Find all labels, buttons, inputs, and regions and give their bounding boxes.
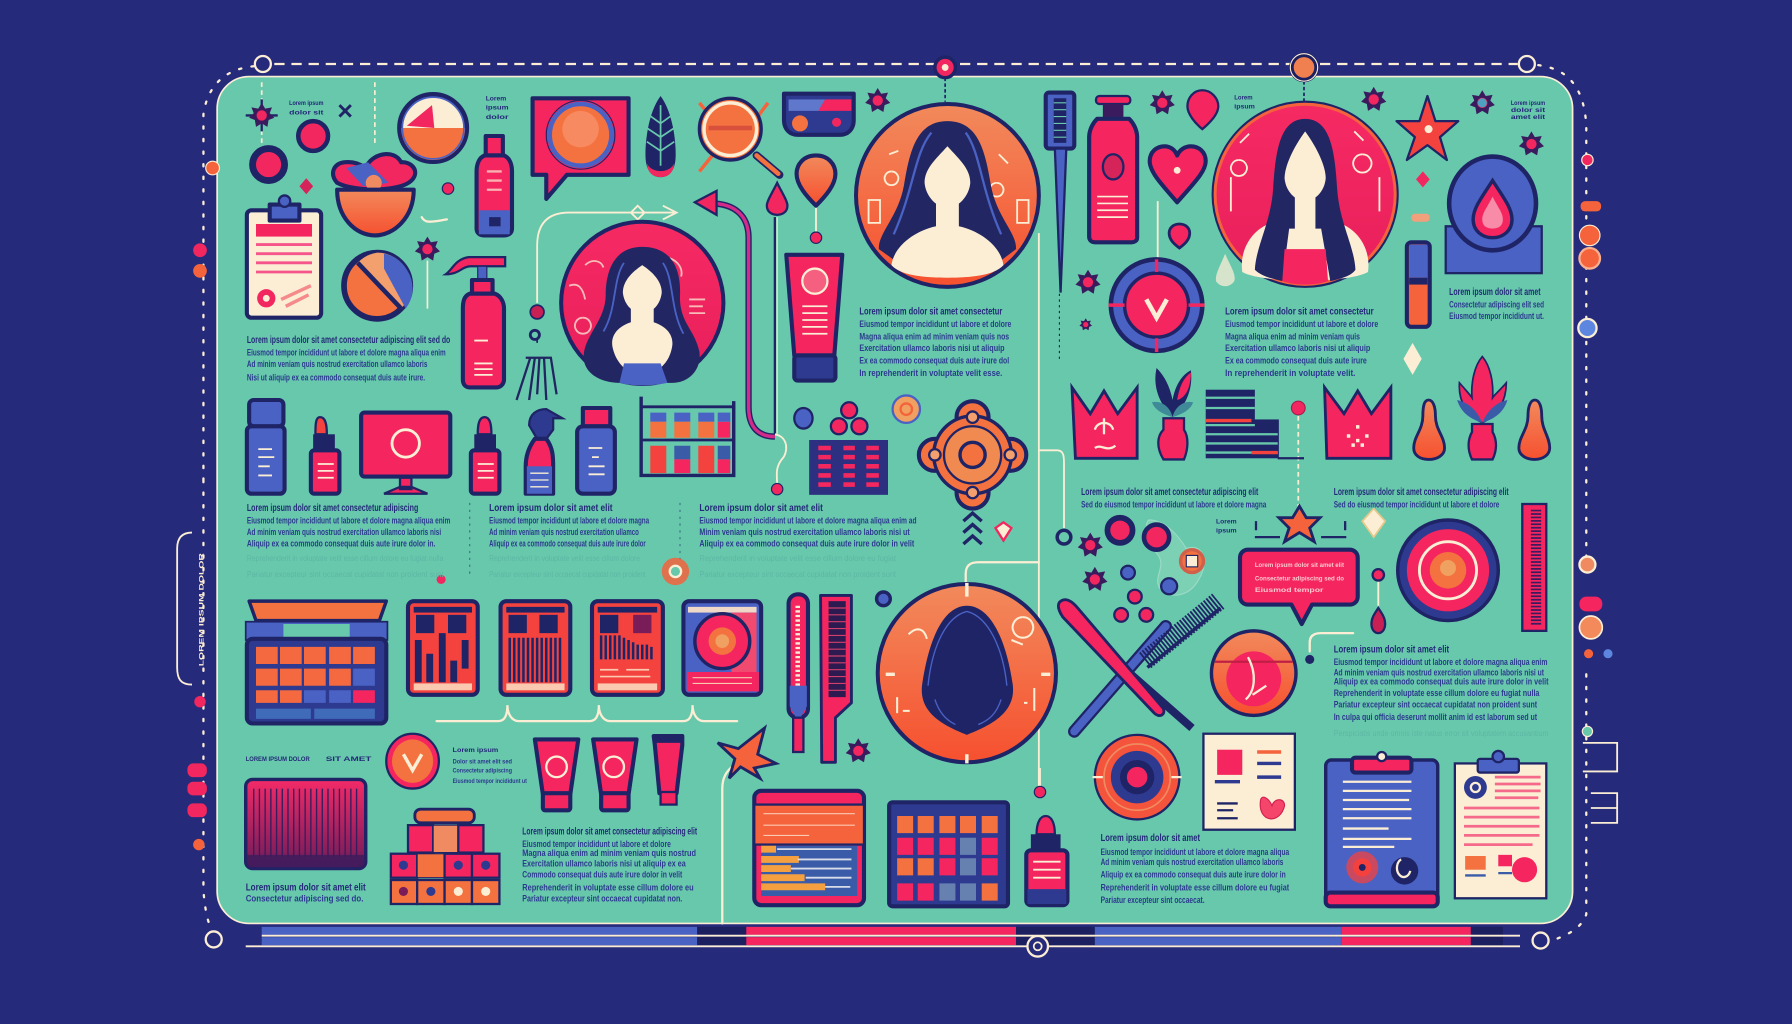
icon: tiny accent [1079,318,1092,330]
icon: small shield [1169,224,1190,248]
text block: bottom left middle: Eiusmod tempor incididunt ut labore et dolore [522,839,671,849]
text block: top right [1449,287,1544,321]
text block: centre column: Exercitation ullamco laboris nisi ut aliquip [1225,343,1371,353]
icon: blue bottle [247,400,285,494]
text block: right middle: Eiusmod tempor incididunt ut labore et dolore magna aliqua enim [1334,657,1547,667]
text block: crown captions left: Lorem ipsum dolor sit amet consectetur adipiscing elit [1081,487,1259,498]
chart: stepped stripes [1206,390,1304,458]
text block: crown captions left [1081,487,1267,509]
chart card: bars three [592,601,663,695]
text block: bottom right [1101,833,1290,905]
portrait: orange hair silhouette [878,583,1056,763]
icon: flower ornament [1361,87,1386,111]
left side strip: LOREM IPSUM DOLOR [198,552,205,666]
text block: row three column three: Lorem ipsum dolor sit amet elit [699,503,824,514]
text block: row three column one [247,503,450,579]
text block: bottom left middle: Reprehenderit in voluptate esse cillum dolore eu [522,882,694,892]
icon: tools [339,105,351,117]
text block: centre column [1225,306,1378,378]
icon: target button [1109,259,1205,352]
icon: heart [1150,146,1206,202]
icon: palette rack [641,397,734,475]
icon: pie chart [400,95,466,161]
icon: clipboard [247,195,321,318]
icon: lipstick [1407,242,1430,327]
label: top right caption: amet elit [1511,114,1546,121]
text block: row three column three: Aliquip ex ea commodo consequat duis aute irure dolor in velit [699,538,914,548]
icon: blue clipboard [1326,752,1438,906]
callout bubble [1240,550,1358,624]
text block: row three column three: Reprehenderit in voluptate velit esse cillum dolore eu fugiat [699,554,897,563]
text block: top right: Lorem ipsum dolor sit amet [1449,287,1541,298]
text block: row three column three: Pariatur excepteur sint occaecat cupidatat non proident sunt [699,570,897,579]
icon: blue drop medallion [1446,157,1542,273]
icon: dark striped card [809,440,888,495]
icon: pin over chart [1291,401,1305,415]
label: cluster caption: Lorem [1216,518,1237,525]
text block: top right: Consectetur adipiscing elit sed [1449,299,1544,309]
text block: bottom right: Eiusmod tempor incididunt ut labore et dolore magna aliqua [1101,847,1290,857]
text block: top left: Nisi ut aliquip ex ea commodo consequat duis aute irure. [247,373,425,383]
icon: plant pot two [1457,357,1507,459]
icon: plant pot one [1152,368,1193,459]
text block: centre column: In reprehenderit in voluptate velit. [1225,368,1355,378]
label: top left caption: Lorem ipsum [289,100,324,107]
top dashed connector [203,54,1586,571]
card: circular button [683,601,761,695]
text block: row three column two: Aliquip ex ea commodo consequat duis aute irure dolor [489,538,646,548]
text block: centre column: Lorem ipsum dolor sit amet consectetur [1225,306,1374,317]
text block: row three column one: Lorem ipsum dolor sit amet consectetur adipiscing [247,503,418,514]
label: dashed caption [246,756,372,763]
text block: bottom right: Lorem ipsum dolor sit amet [1101,833,1201,844]
icon: drop vase two [1519,400,1550,459]
label: pie caption: ipsum [486,105,509,112]
text block: tube column: Lorem ipsum dolor sit amet consectetur [859,306,1002,317]
label: top left caption: dolor sit [289,109,325,116]
text block: right middle: Reprehenderit in voluptate esse cillum dolore eu fugiat nulla [1334,688,1540,698]
icon: small target [893,395,920,423]
icon: brush [517,358,557,400]
icon: ring node [877,592,890,606]
icon: bowl with flower [333,154,415,235]
text block: row three column three: Minim veniam quis nostrud exercitation ullamco laboris nisi ut [699,527,910,537]
label: dashed caption: SIT AMET [326,756,372,763]
icon: star flower [846,738,871,762]
text block: tube column: Eiusmod tempor incididunt ut labore et dolore [859,319,1011,329]
icon: flower ornament right [1470,90,1495,114]
icon: balloon pin [797,155,835,206]
icon: comb upright [821,595,851,762]
icon: flower near comb [1075,270,1101,294]
icon: network dots cluster [1078,518,1204,622]
icon: orange pink circle [1211,631,1296,715]
text block: row three column two: Eiusmod tempor incididunt ut labore et dolore magna [489,515,650,525]
text block: crown captions right [1334,487,1509,509]
callout bubble: Consectetur adipiscing sed do [1255,576,1344,583]
icon: thermometer brush [789,594,808,752]
text block: swatch caption [246,882,366,904]
text block: bottom left middle: Commodo consequat duis aute irure dolor in velit [522,870,682,880]
icon: big card [754,791,864,905]
icon: spray bottle [446,257,505,387]
icon: cream clipboard [1455,751,1546,898]
icon: no sign [344,253,413,319]
text block: row three column three: Eiusmod tempor incididunt ut labore et dolore magna aliqua enim ad [699,515,917,525]
label: pin caption: Lorem [1234,94,1253,101]
text block: v button caption: Consectetur adipiscing [453,768,512,775]
text block: bottom left middle [522,826,698,904]
icon: speech bubble [533,98,629,199]
text block: tube column: Ex ea commodo consequat duis aute irure dol [859,355,1009,365]
text block: row three column two: Lorem ipsum dolor sit amet elit [489,503,613,514]
icon: pin with drop [1371,569,1385,633]
icon: starburst small [415,237,440,261]
icon: tall pink bottle [1089,96,1137,242]
icon: comb tall [1046,93,1074,293]
icon: pink bottle [477,136,512,235]
text block: row three column one: Aliquip ex ea commodo consequat duis aute irure dolor in. [247,538,435,548]
text block: row three column two: Ad minim veniam quis nostrud exercitation ullamco [489,527,639,537]
text block: row three column three [699,503,917,579]
text block: row three column one: Pariatur excepteur sint occaecat cupidatat non proident sunt [247,570,444,579]
portrait: pink woman wavy hair [561,222,723,385]
text block: right middle: Perspiciatis unde omnis iste natus error sit voluptatem accusantium [1334,729,1549,738]
text block: crown captions right: Sed do eiusmod tempor incididunt ut labore et dolore [1334,499,1499,509]
label: top left caption [289,100,325,116]
right side strip [1578,154,1617,823]
label: pin caption: ipsum [1234,104,1255,111]
icon: pink location pin [1187,90,1218,129]
text block: row three column one: Reprehenderit in voluptate velit esse cillum dolore eu fugiat nulla [247,554,444,563]
text block: crown captions right: Lorem ipsum dolor sit amet consectetur adipiscing elit [1334,487,1509,498]
icon: comb strip [1522,504,1546,631]
text block: top left [247,335,450,383]
text block: v button caption [453,747,527,785]
icon: cream accent [1216,254,1235,286]
text block: centre column: Ex ea commodo consequat duis aute irure [1225,355,1367,365]
icon: chevrons [963,513,982,544]
icon: accents [1403,171,1430,375]
text block: row three column two: Reprehenderit in voluptate velit esse cillum dolore [489,554,640,563]
icon: hair swatch [246,779,366,869]
icon: big target [1398,520,1498,621]
icon: crown one [1072,387,1137,458]
icon: drop [767,183,787,215]
icon: monitor [361,413,450,494]
icon: crossed comb and brush [1058,600,1221,731]
text block: tube column [859,306,1011,378]
text block: top right: Eiusmod tempor incididunt ut. [1449,311,1544,321]
icon: pink dot two [253,149,285,181]
label: top right caption [1511,100,1546,121]
icon: magnifier [699,98,779,175]
text block: right middle: In culpa qui officia deserunt mollit anim id est laborum sed ut [1334,712,1537,722]
text block: centre column: Eiusmod tempor incididunt ut labore et dolore [1225,319,1378,329]
icon: starburst top left [246,99,278,131]
text block: bottom left middle: Lorem ipsum dolor sit amet consectetur adipiscing elit [522,826,698,837]
chart card: bars one [408,601,478,695]
icon: pink dot [298,121,328,151]
text block: row three column one: Ad minim veniam quis nostrud exercitation ullamco laboris nisi [247,527,441,537]
icon: small spray [526,409,562,494]
text block: right middle: Lorem ipsum dolor sit amet elit [1334,645,1450,656]
text block: bottom right: Ad minim veniam quis nostrud exercitation ullamco laboris [1101,857,1283,867]
icon: concentric disc [1093,735,1182,819]
icon: orange ornament [919,401,1026,509]
label: top right caption: dolor sit [1511,107,1546,114]
text block: bottom right: Reprehenderit in voluptate esse cillum dolore eu fugiat [1101,882,1289,892]
left side strip [177,161,219,850]
label: pie caption: dolor [486,114,509,121]
text block: bottom left middle: Magna aliqua enim ad minim veniam quis nostrud [522,848,696,858]
text block: row three column one: Eiusmod tempor incididunt ut labore et dolore magna aliqua enim [247,515,450,525]
icon: curved connector with arrow [530,206,677,343]
bottom colour band [203,480,1586,957]
callout bubble: Lorem ipsum dolor sit amet elit [1255,562,1345,569]
icon: flower ornament lower [1519,131,1544,155]
text block: swatch caption: Consectetur adipiscing sed do. [246,894,363,904]
label: pin caption [1234,94,1255,111]
icon: diamonds and dots [299,178,454,222]
panel: main board [217,77,1573,923]
text block: crown captions left: Sed do eiusmod tempor incididunt ut labore et dolore magna [1081,499,1267,509]
icon: flower tiny [1150,90,1175,114]
text block: right middle: Ad minim veniam quis nostrud exercitation ullamco laboris nisi ut [1334,667,1544,677]
label: dashed caption: LOREM IPSUM DOLOR [246,756,310,763]
icon: drop vase one [1414,400,1445,459]
arrow: magenta curved [695,191,775,437]
text block: v button caption: Eiusmod tempor incididunt ut [453,778,527,785]
text block: bottom left middle: Exercitation ullamco laboris nisi ut aliquip ex ea [522,858,686,868]
text block: top left: Lorem ipsum dolor sit amet consectetur adipiscing elit sed do [247,335,450,346]
icon: v button [386,734,439,789]
portrait: orange woman straight hair [856,104,1039,287]
text block: swatch caption: Lorem ipsum dolor sit amet elit [246,882,366,893]
text block: v button caption: Lorem ipsum [453,747,498,754]
label: top right caption: Lorem ipsum [1511,100,1546,107]
text block: right middle: Pariatur excepteur sint occaecat cupidatat non proident sunt [1334,699,1537,709]
text block: right middle: Aliquip ex ea commodo consequat duis aute irure dolor in velit [1334,677,1549,687]
icon: tube [786,255,842,381]
icon: tube two [593,739,637,810]
text block: row three column two [489,503,650,579]
icon: tube one [535,739,578,810]
label: pie caption [486,96,509,121]
text block: bottom right: Pariatur excepteur sint occaecat. [1101,895,1205,905]
icon: document card [1203,734,1295,830]
text block: tube column: Magna aliqua enim ad minim veniam quis nos [859,331,1009,341]
icon: calendar palette [246,601,387,723]
icon: dots cluster [794,402,867,434]
icon: star with bracket [1255,506,1346,542]
icon: flower small [865,88,890,112]
icon: block pyramid [391,809,499,904]
label: cluster caption [1216,518,1237,535]
text block: right middle [1334,645,1549,738]
label: pie caption: Lorem [486,96,507,103]
text block: top left: Eiusmod tempor incididunt ut labore et dolore magna aliqua enim [247,347,446,357]
text block: tube column: In reprehenderit in voluptate velit esse. [859,368,1002,378]
icon: small gem [995,522,1011,541]
icon: star orange [718,728,776,778]
text block: bottom left middle: Pariatur excepteur sint occaecat cupidatat non. [522,894,682,904]
icon: leaf sprig [645,96,676,177]
icon: accent arrow [1362,509,1385,537]
icon: small bottle [1026,816,1067,905]
text block: v button caption: Dolor sit amet elit sed [453,758,512,765]
label: cluster caption: ipsum [1216,528,1237,535]
icon: red star [1397,96,1458,160]
text block: centre column: Magna aliqua enim ad minim veniam quis [1225,331,1360,341]
callout bubble: Eiusmod tempor [1255,587,1324,594]
text block: top left: Ad minim veniam quis nostrud exercitation ullamco laboris [247,359,427,369]
icon: dropper bottle [311,417,339,494]
icon: tray [784,94,854,135]
icon: tube three [654,735,682,805]
text block: tube column: Exercitation ullamco laboris nisi ut aliquip [859,343,1005,353]
icon: calendar grid [889,802,1008,906]
portrait: pink woman long hair [1213,102,1398,287]
text block: bottom right: Aliquip ex ea commodo consequat duis aute irure dolor in [1101,870,1286,880]
text block: row three column two: Pariatur excepteur sint occaecat cupidatat non proident [489,570,646,579]
vertical connector lines [262,82,1353,923]
icon: dropper bottle two [471,417,499,494]
icon: blue bottle two [577,408,615,494]
icon: crown two [1325,387,1391,458]
chart card: bars two [501,601,570,695]
